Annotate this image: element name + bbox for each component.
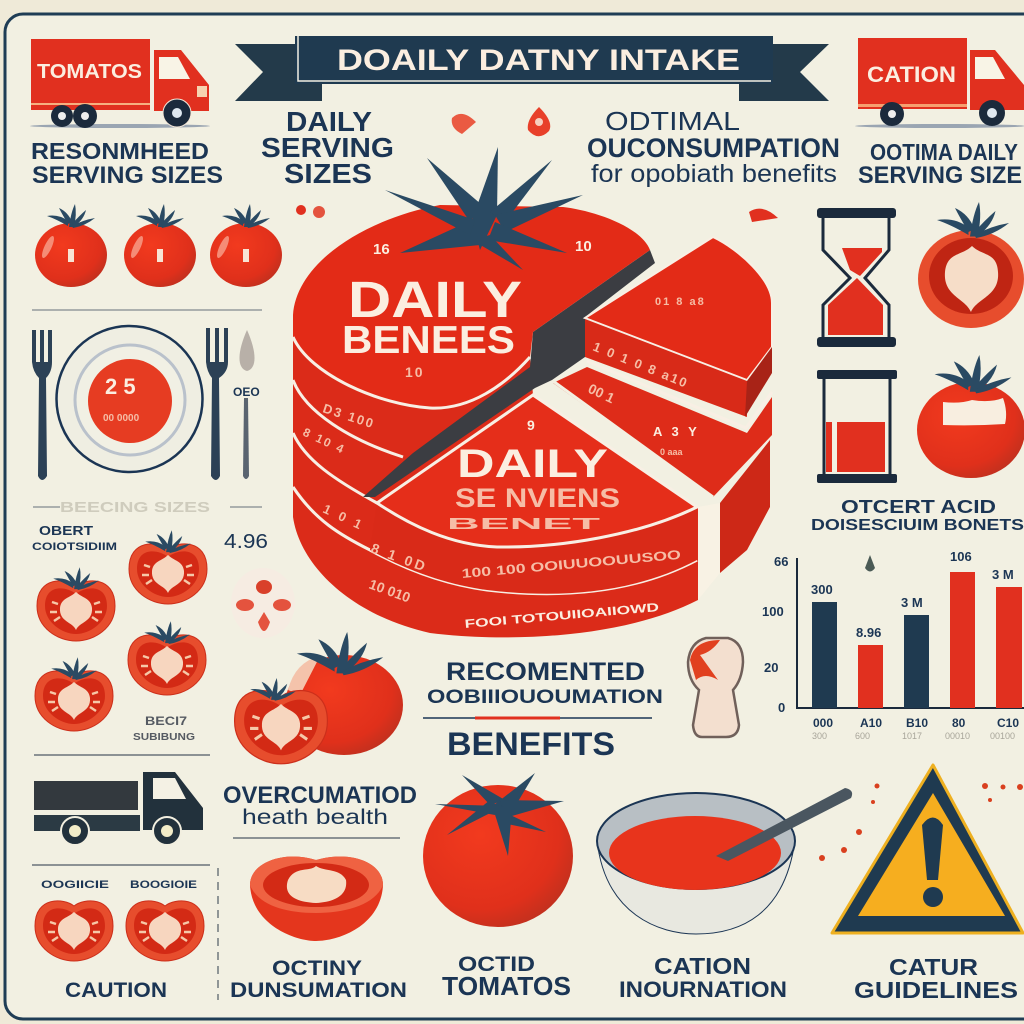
text: organic acid: OTCERT ACID [841, 497, 996, 517]
icon: round emblem [231, 568, 295, 638]
truck: tomatoes: TOMATOS [37, 61, 142, 83]
small cut tomatoes, bottom left: BOOGIOIE [130, 879, 197, 891]
text: obesity small label: OBERT [39, 523, 93, 538]
small decorative tomato marks [296, 107, 778, 222]
small caption: SUBIBUNG [133, 732, 195, 743]
text: recommended benefits: RECOMENTED [446, 658, 645, 686]
pie: front slice: 9 [527, 417, 535, 433]
percent label: 4.96 [224, 531, 268, 553]
pie: right upper slice [585, 237, 772, 417]
text: recommended benefits: BENEFITS [447, 726, 615, 762]
footer label: caution guidelines: CATUR [889, 954, 978, 980]
pie: front slice: 8 1 0D [369, 540, 430, 575]
bar chart: 20 [764, 660, 778, 675]
whole tomato, right [917, 355, 1024, 478]
footer label: caution information [619, 953, 787, 1002]
bowl of tomato soup [597, 788, 852, 934]
footer label: acid tomatoes: TOMATOS [442, 971, 571, 1001]
pie: top slice: BENEES [342, 319, 515, 362]
bar chart: 0 [778, 700, 785, 715]
text: overconsumption: OVERCUMATIOD [223, 782, 417, 809]
text: recommended benefits [423, 658, 663, 762]
bar chart: 600 [855, 731, 870, 741]
text: recommended serving sizes: RESONMHEED [31, 138, 209, 164]
pie: top slice: DAILY [348, 271, 522, 328]
main stacked pie chart [293, 147, 772, 637]
footer label: optimal consumption: OCTINY [272, 957, 362, 980]
text: optimal consumption [587, 106, 840, 188]
pie: front slice: 100 100 OOIUUOOUUSOO [461, 547, 681, 581]
pie: front slice [321, 395, 697, 631]
small caption: BECI7 [145, 714, 187, 728]
cutlery and plate: 2 5 [105, 374, 136, 399]
pie: tomato stem on top [385, 147, 583, 270]
bar chart: 3 M [901, 595, 923, 610]
pie: front slice: SE NVIENS [455, 483, 620, 513]
text: serving sizes faded: BEECING SIZES [60, 499, 210, 516]
tomato, large whole [423, 773, 573, 927]
cut tomatoes cluster [35, 530, 207, 731]
pie: right lower slice: A 3 Y [653, 424, 700, 439]
title banner: DOAILY DATNY INTAKE [337, 44, 740, 77]
bar chart: 100 [762, 604, 784, 619]
text: organic acid: DOISESCIUIM BONETS [811, 517, 1024, 534]
pair of tomatoes whole and cut [235, 632, 403, 764]
pie: silhouette and layer walls [293, 320, 770, 637]
pie: top slice: D3 100 [321, 401, 377, 432]
footer label: caution guidelines [854, 954, 1018, 1003]
footer label: caution guidelines: GUIDELINES [854, 977, 1018, 1003]
bar chart: C10 [997, 716, 1019, 730]
truck: tomatoes [30, 39, 210, 128]
text: optimal consumption: for opobiath benefits [591, 160, 837, 188]
bar chart: 00010 [945, 731, 970, 741]
pie: dark gap [363, 250, 655, 497]
hourglass [817, 208, 896, 347]
footer label: optimal consumption [230, 957, 407, 1002]
pie: front slice: FOOI TOTOUIIOAIIOWD [464, 600, 660, 631]
text: optimal consumption: ODTIMAL [605, 106, 740, 136]
cutlery and plate: OEO [233, 385, 260, 399]
glass [817, 370, 897, 483]
bar chart: 8.96 [856, 625, 881, 640]
pie: white slit [698, 503, 720, 600]
bar chart [762, 549, 1024, 741]
text: recommended benefits: OOBIIIOUOUMATION [427, 687, 663, 708]
footer label: caution information: CATION [654, 953, 751, 979]
footer label: caution information: INOURNATION [619, 977, 787, 1002]
text: overconsumption: heath bealth [242, 806, 388, 829]
dividers [32, 755, 400, 865]
cutlery and plate [32, 326, 260, 480]
bar chart: 300 [812, 731, 827, 741]
text: recommended serving sizes [31, 138, 223, 189]
bar chart: 80 [952, 716, 966, 730]
pie: top slice: 16 [373, 241, 390, 258]
text: daily serving sizes: SERVING [261, 132, 394, 163]
bar chart: 300 [811, 582, 833, 597]
bar chart: 000 [813, 716, 833, 730]
small cut tomatoes, bottom left [35, 879, 204, 961]
bar chart: 1017 [902, 731, 922, 741]
text: serving sizes faded [32, 310, 262, 516]
text: optimal daily serving size [858, 139, 1022, 189]
footer label: caution: CAUTION [65, 979, 167, 1002]
pie: front slice: 10 010 [367, 576, 413, 606]
pie: top slice [293, 205, 650, 457]
bar chart: 3 M [992, 567, 1014, 582]
cut tomato large [250, 856, 383, 941]
footer label: optimal consumption: DUNSUMATION [230, 979, 407, 1002]
text: recommended serving sizes: SERVING SIZES [32, 162, 223, 189]
pie: top slice: 10 [575, 238, 592, 255]
bar chart: 66 [774, 554, 788, 569]
text: overconsumption [223, 782, 417, 829]
text: optimal consumption: OUCONSUMPATION [587, 133, 840, 163]
text: daily serving sizes: DAILY [286, 106, 372, 137]
text: organic acid [811, 497, 1024, 534]
footer label: acid tomatoes: OCTID [458, 953, 535, 976]
text: optimal daily serving size: SERVING SIZE [858, 162, 1022, 189]
pie: right lower slice: 00 1 [586, 380, 617, 406]
pie: top slice: 8 10 4 [301, 425, 348, 457]
text: obesity small label: COIOTSIDIIM [32, 541, 117, 553]
row of three tomatoes [35, 204, 282, 287]
pie: front slice: BENET [447, 516, 601, 533]
icon: keyhole bottle [688, 638, 743, 737]
warning triangle [819, 765, 1023, 933]
pie: right lower slice [553, 361, 772, 497]
small cut tomatoes, bottom left: OOGIICIE [41, 879, 109, 891]
bar chart: A10 [860, 716, 882, 730]
pie: front slice: 1 0 1 [321, 501, 367, 533]
title banner [235, 36, 829, 101]
small caption [133, 714, 195, 743]
truck: caution [855, 38, 1024, 128]
truck: caution: CATION [867, 62, 956, 87]
pie: right upper slice: 01 8 a8 [655, 296, 706, 308]
cutlery and plate: 00 0000 [103, 413, 140, 424]
bar chart: 106 [950, 549, 972, 564]
bar chart: 00100 [990, 731, 1015, 741]
pie: right lower slice: 0 aaa [660, 447, 684, 457]
truck: dark [34, 772, 203, 845]
pie: right upper slice: 1 0 1 0 8 a10 [591, 339, 691, 391]
pie: front slice: DAILY [457, 442, 608, 486]
text: daily serving sizes [261, 106, 394, 189]
bar chart: B10 [906, 716, 928, 730]
text: daily serving sizes: SIZES [284, 158, 372, 189]
footer label: acid tomatoes [442, 953, 571, 1001]
pie: top slice: 10 [405, 364, 425, 380]
cut tomato, upper right [918, 202, 1024, 328]
text: obesity small label [32, 523, 117, 553]
